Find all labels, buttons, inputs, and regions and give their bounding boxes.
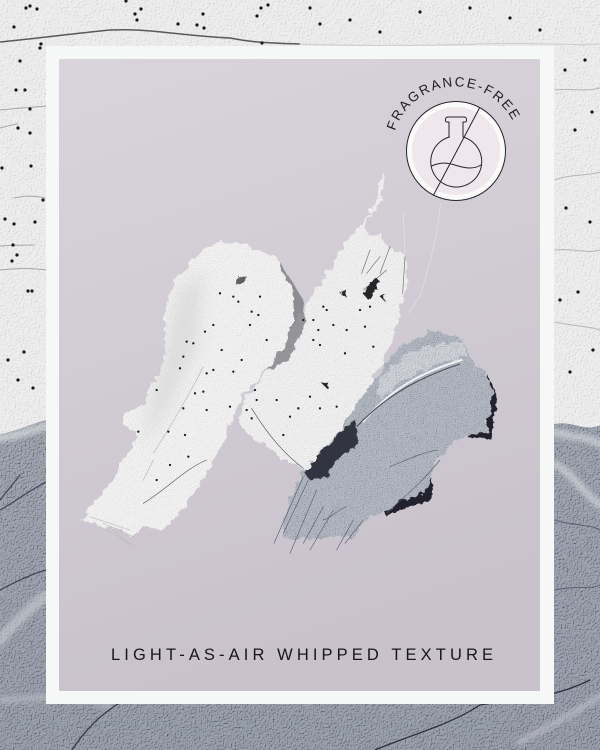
grey swatch streaks	[274, 450, 440, 553]
swatch: white cream, left stroke	[80, 241, 293, 537]
swatch: blue-grey cream	[282, 330, 493, 540]
crest shading on the left stroke	[268, 260, 305, 370]
badge: fragrance-free	[386, 77, 520, 201]
badge inner tint	[412, 107, 500, 195]
white cream area	[0, 0, 600, 434]
badge label: FRAGRANCE-FREE	[386, 77, 520, 130]
soft shading on left stroke	[148, 280, 203, 426]
pale sweeps in the margins	[0, 426, 600, 742]
icon: crossed-out flask	[431, 108, 482, 195]
panel: lilac background	[59, 59, 540, 691]
crater and dark speckles in the white cream	[236, 275, 247, 285]
pale top ridge	[378, 342, 467, 400]
grey swatch ridge	[363, 360, 462, 422]
swatch shadows	[383, 373, 497, 517]
swatches of cream	[80, 172, 497, 553]
white frame	[46, 46, 554, 704]
caption: LIGHT-AS-AIR WHIPPED TEXTURE	[111, 646, 493, 664]
swatch edge lines	[90, 247, 405, 548]
shadow between white and grey swatches	[303, 420, 358, 480]
faint hair strokes above the middle swatch	[403, 203, 441, 313]
swatch: white cream, middle stroke	[238, 172, 407, 470]
background black specks	[2, 1, 593, 388]
badge disc	[406, 102, 506, 200]
